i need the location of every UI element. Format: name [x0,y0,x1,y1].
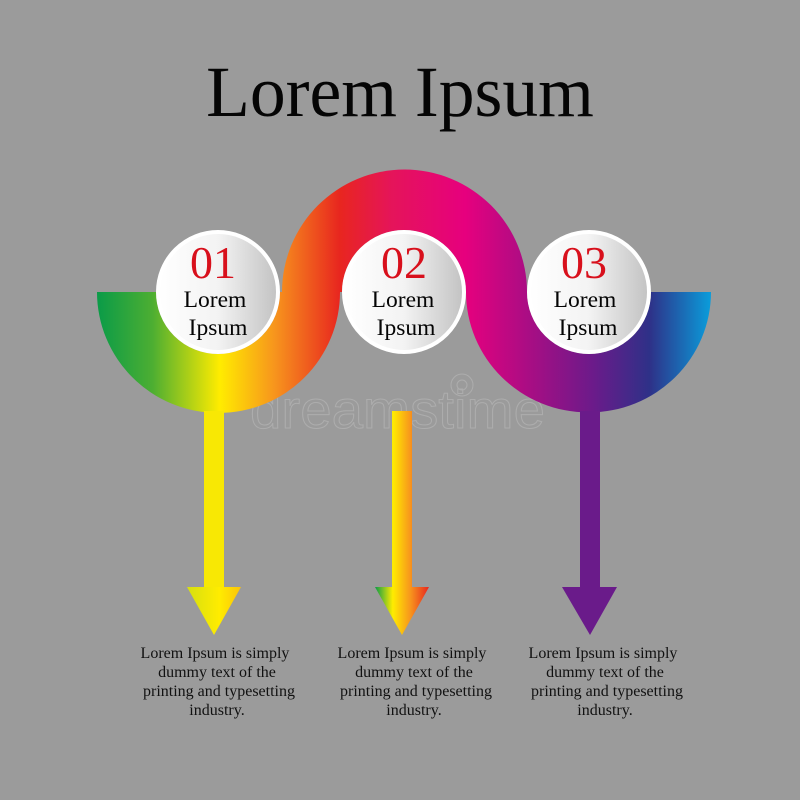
text block: middle: industry. [386,702,442,719]
circle 02: Lorem [372,287,434,313]
circle 03: Lorem [554,287,616,313]
text block: middle: Lorem Ipsum is simply [338,645,486,662]
circle 01: 01 [190,237,236,288]
text block: middle: printing and typesetting [340,683,492,700]
text block: left: Lorem Ipsum is simply [141,645,289,662]
circle 03: 03 [561,237,607,288]
circle 01: Lorem [184,287,246,313]
circle 01 [158,232,278,352]
watermark: dreamstime [250,380,545,440]
text block: left [141,645,295,719]
text block: middle: dummy text of the [355,664,473,681]
circle 01: Ipsum [189,315,247,341]
text block: middle [338,645,492,719]
text block: left: printing and typesetting [143,683,295,700]
circle 03: Ipsum [559,315,617,341]
arrow: middle rainbow [375,411,429,635]
text block: right: Lorem Ipsum is simply [529,645,677,662]
text block: right [529,645,683,719]
text block: left: industry. [189,702,245,719]
circle 02: 02 [381,237,427,288]
circle 02 [344,232,464,352]
circle 02: Ipsum [377,315,435,341]
text block: right: industry. [577,702,633,719]
circle 03 [529,232,649,352]
text block: right: dummy text of the [546,664,664,681]
text block: left: dummy text of the [158,664,276,681]
title: Lorem Ipsum [206,53,594,132]
rainbow wave band [97,170,711,413]
arrow: left yellow [187,411,241,635]
arrow: right purple [562,411,617,635]
text block: right: printing and typesetting [531,683,683,700]
